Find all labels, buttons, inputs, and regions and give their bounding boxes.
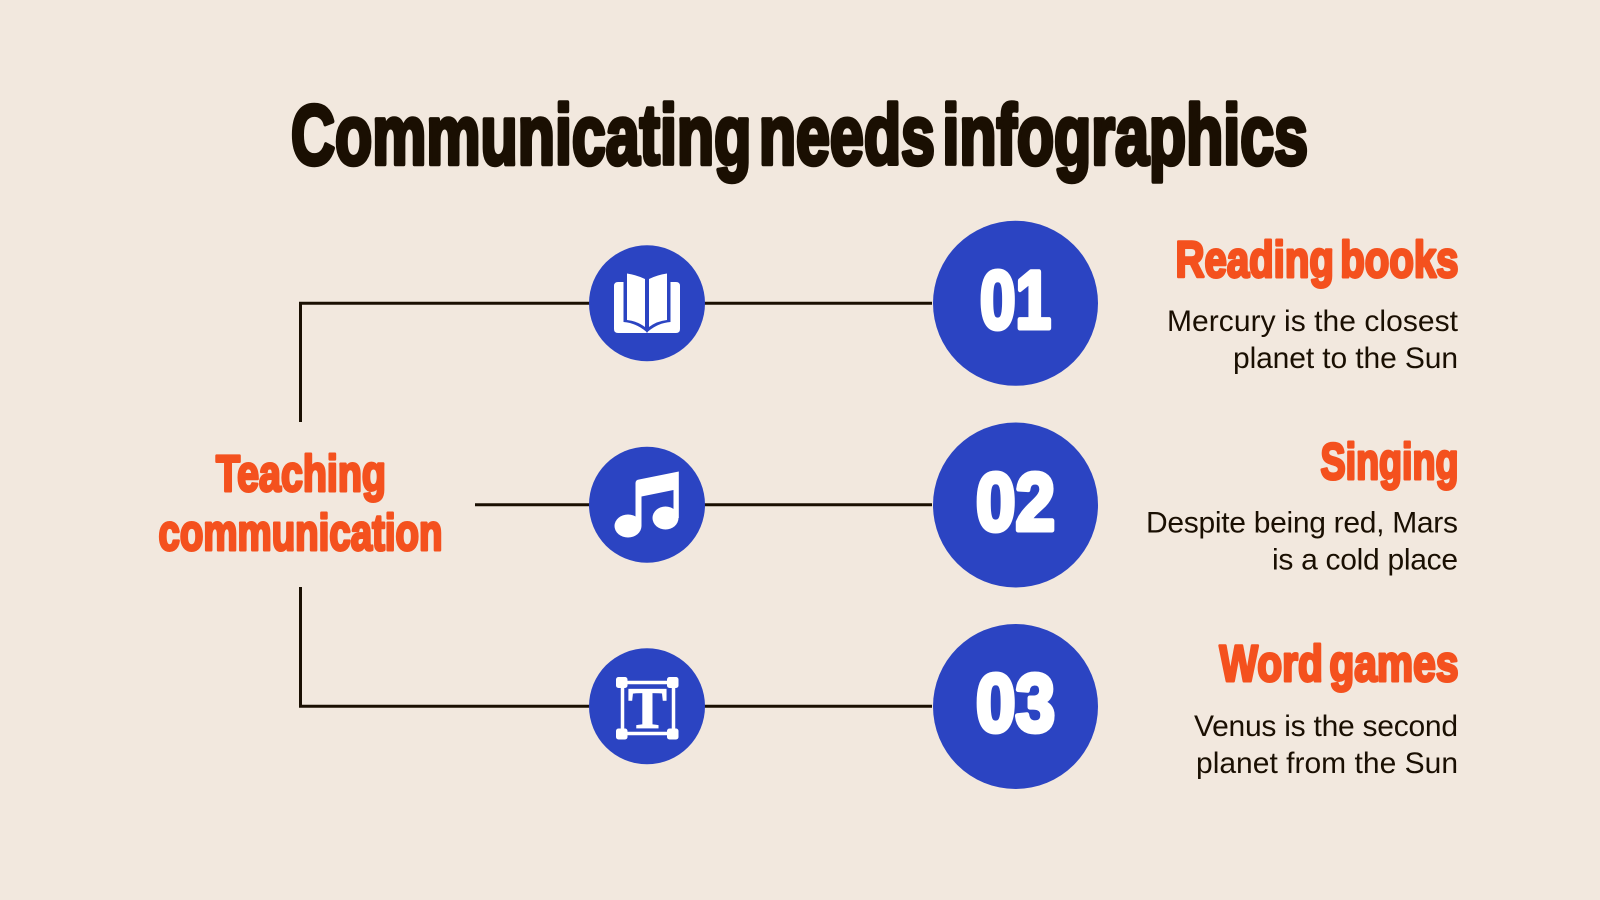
connector: middle branch: [475, 503, 932, 506]
heading: Singing: Singing: [1320, 433, 1458, 490]
description: Mercury: planet to the Sun: [1233, 342, 1458, 375]
description: Venus: planet from the Sun: [1196, 747, 1458, 780]
number badge 03: [933, 624, 1098, 789]
central label: Teaching communication: [158, 445, 442, 561]
number badge 02: [933, 422, 1098, 588]
row 3: word games: [589, 624, 1458, 789]
description: Mars: is a cold place: [1272, 544, 1458, 576]
number badge 01: [933, 221, 1098, 386]
central label: Teaching communication: Teaching: [216, 445, 386, 502]
icon: open book: [589, 245, 705, 361]
central label: Teaching communication: communication: [158, 504, 442, 561]
number badge 01: 01: [980, 255, 1051, 346]
description: Mars: [1146, 506, 1458, 576]
row 2: singing: [589, 422, 1458, 588]
number badge 03: 03: [976, 658, 1055, 749]
description: Venus: [1194, 710, 1458, 780]
connector: bottom branch: [300, 587, 932, 706]
icon: music notes: [589, 447, 705, 563]
number badge 02: 02: [976, 457, 1055, 548]
icon: text frame: T: [628, 676, 667, 740]
connector: top branch: [300, 303, 932, 422]
row 1: reading books: [589, 221, 1459, 386]
description: Venus: Venus is the second: [1194, 710, 1458, 743]
icon: text frame: [589, 648, 705, 764]
description: Mercury: Mercury is the closest: [1167, 305, 1459, 338]
description: Mars: Despite being red, Mars: [1146, 506, 1458, 540]
heading: Reading books: Reading books: [1176, 231, 1458, 288]
description: Mercury: [1167, 305, 1459, 375]
heading: Word games: Word games: [1220, 635, 1458, 692]
